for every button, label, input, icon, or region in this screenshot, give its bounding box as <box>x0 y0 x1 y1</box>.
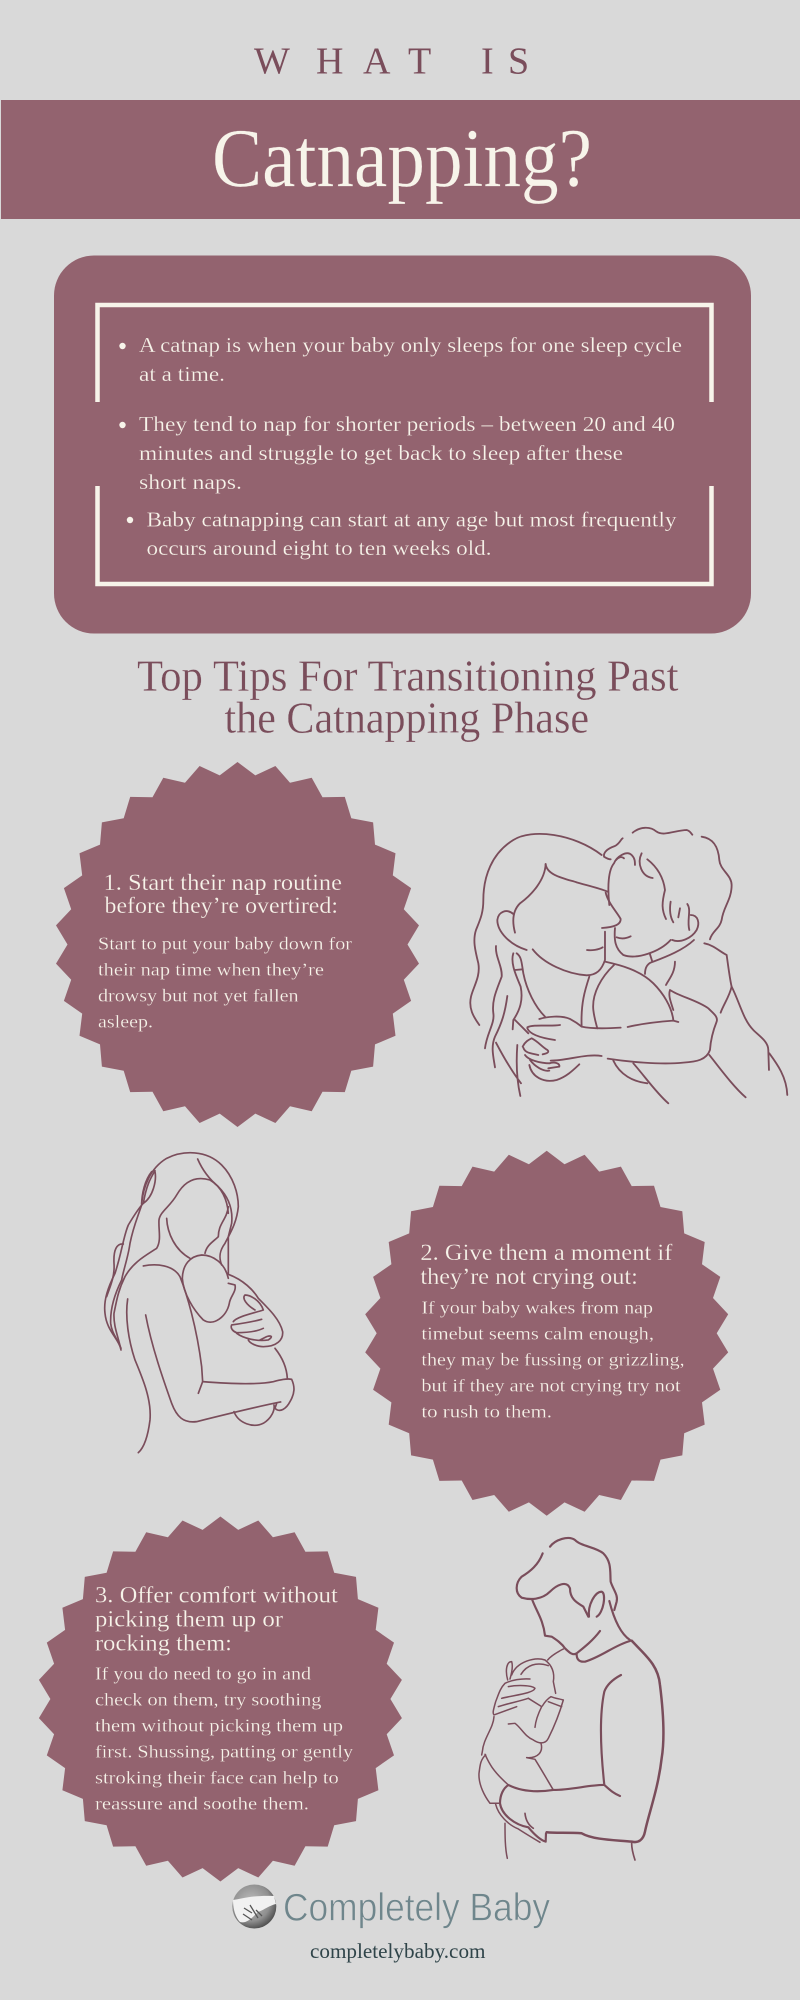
tip 3 body <box>95 1663 353 1813</box>
tip 2 heading: 2. Give them a moment if <box>420 1240 673 1265</box>
tip 1 heading <box>104 870 342 918</box>
illustration: mother hugging child <box>470 828 787 1103</box>
tip 3 heading: rocking them: <box>95 1631 232 1656</box>
bullet: nap length: short naps. <box>139 470 242 494</box>
tip 1 body: asleep. <box>98 1011 153 1031</box>
website url: completelybaby.com <box>310 1939 486 1963</box>
tip 2 heading <box>420 1240 673 1289</box>
tip 2 heading: they’re not crying out: <box>420 1264 638 1289</box>
tip 3 heading: 3. Offer comfort without <box>95 1583 338 1608</box>
bullet: when it starts: Baby catnapping can start at any age but most frequently <box>146 508 677 532</box>
bullet: what a catnap is: at a time. <box>139 362 225 386</box>
tip 2 body: they may be fussing or grizzling, <box>421 1349 685 1369</box>
tip 1 heading: 1. Start their nap routine <box>104 870 342 895</box>
tip 2 body: timebut seems calm enough, <box>421 1323 654 1343</box>
tip 3 body: reassure and soothe them. <box>95 1793 309 1813</box>
icon: globe with hands <box>232 1884 276 1928</box>
tip 1 heading: before they’re overtired: <box>104 893 338 918</box>
tip 3 body: first. Shussing, patting or gently <box>95 1741 353 1761</box>
tip 1 body <box>98 933 352 1031</box>
tip 3 body: If you do need to go in and <box>95 1663 311 1683</box>
tip 3 heading: picking them up or <box>95 1607 283 1632</box>
title banner <box>1 100 800 219</box>
title: what is: WHAT IS <box>254 40 529 82</box>
bullet: when it starts <box>127 508 677 560</box>
title: catnapping: Catnapping? <box>212 112 592 205</box>
panel: tip 2 starburst <box>365 1151 728 1516</box>
panel: definition <box>54 256 751 634</box>
heading: top tips <box>137 652 678 743</box>
bullet: nap length: minutes and struggle to get back to sleep after these <box>139 441 623 465</box>
bullet: nap length <box>119 412 675 494</box>
illustration: father holding baby <box>479 1538 663 1860</box>
tip 1 body: drowsy but not yet fallen <box>98 985 298 1005</box>
logo: completely baby <box>232 1884 550 1930</box>
heading: top tips: Top Tips For Transitioning Past <box>137 652 678 701</box>
illustration: mother holding baby <box>105 1153 294 1453</box>
tip 3 body: check on them, try soothing <box>95 1689 321 1709</box>
bullet: what a catnap is: A catnap is when your baby only sleeps for one sleep cycle <box>139 333 682 357</box>
logo wordmark: Completely Baby <box>283 1887 550 1930</box>
decorative bracket frame <box>98 305 712 584</box>
bullet: when it starts: occurs around eight to ten weeks old. <box>146 536 492 560</box>
heading: top tips: the Catnapping Phase <box>224 694 589 743</box>
tip 3 body: stroking their face can help to <box>95 1767 339 1787</box>
tip 2 body: If your baby wakes from nap <box>421 1297 653 1317</box>
tip 2 body: to rush to them. <box>421 1401 552 1421</box>
bullet: nap length: They tend to nap for shorter periods – between 20 and 40 <box>139 412 675 436</box>
bullet: what a catnap is <box>119 333 682 386</box>
tip 1 body: their nap time when they’re <box>98 959 324 979</box>
panel: tip 1 starburst <box>56 762 419 1127</box>
tip 3 heading <box>95 1583 338 1656</box>
tip 2 body: but if they are not crying try not <box>421 1376 681 1396</box>
tip 3 body: them without picking them up <box>95 1715 343 1735</box>
tip 1 body: Start to put your baby down for <box>98 933 352 953</box>
tip 2 body <box>421 1297 685 1421</box>
panel: tip 3 starburst <box>39 1516 402 1882</box>
